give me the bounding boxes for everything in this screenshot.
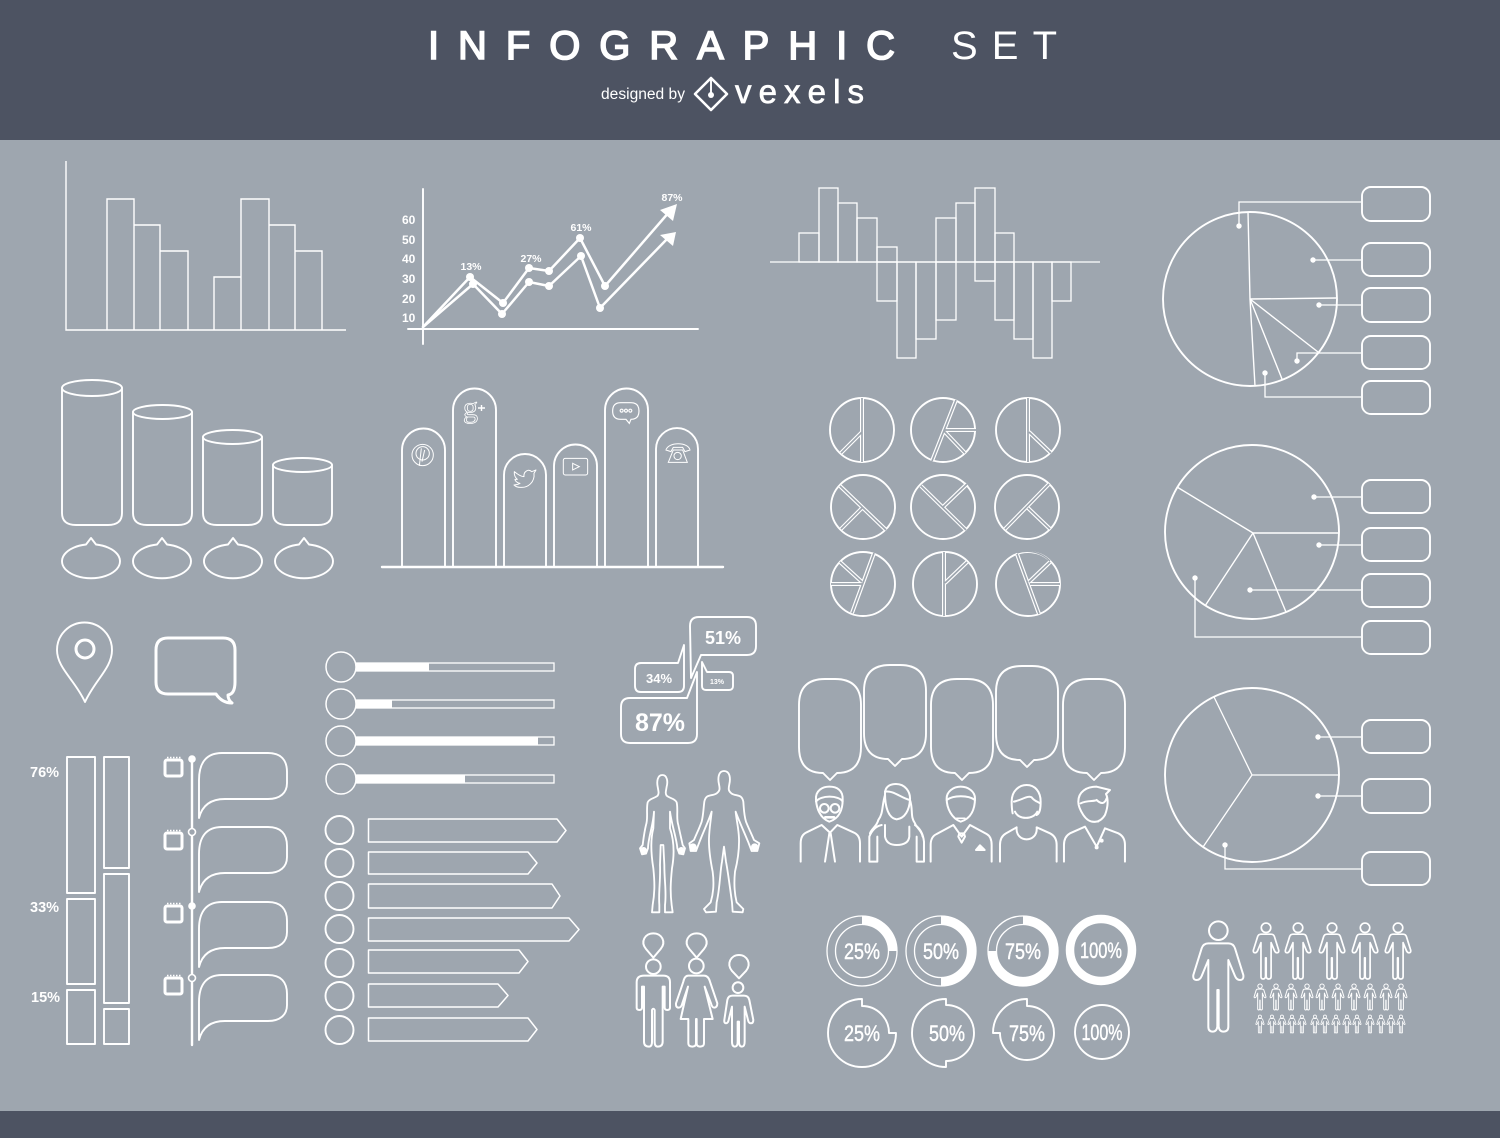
callout boxes [1362, 187, 1430, 414]
large person [1193, 921, 1243, 1032]
y axis labels: 60 [402, 213, 416, 227]
notched circle 25% [828, 999, 896, 1067]
small pie row 1 [830, 398, 1060, 462]
y axis labels: 20 [402, 292, 416, 306]
arrow bars with circles [326, 816, 579, 1044]
timeline with calendars and speech tabs [165, 753, 287, 1045]
callout leaders [1225, 737, 1361, 869]
chart axes [408, 189, 698, 344]
y axis labels: 40 [402, 252, 416, 266]
tall speech bubbles [799, 665, 1125, 780]
cylinder chart [62, 380, 333, 578]
ring 50% [906, 916, 976, 986]
timeline axis and markers [188, 755, 196, 1045]
notched circle 100%: 100% [1082, 1020, 1122, 1045]
trend lines [423, 204, 677, 327]
pie chart 1 with five callouts [1163, 187, 1430, 414]
callout boxes [1362, 480, 1430, 654]
footer band [0, 1111, 1500, 1138]
callout boxes [1362, 720, 1430, 885]
avatar: man with quiff [1064, 787, 1125, 862]
stacked columns [67, 757, 129, 1044]
icon: twitter [514, 470, 536, 487]
percent labels: 61% [570, 222, 592, 234]
ring 25% [827, 916, 897, 986]
percent labels: 76% [30, 765, 59, 781]
line chart: two rising trends [402, 189, 698, 344]
ring 100% [1070, 919, 1132, 981]
header band [0, 0, 1500, 140]
bubble 51%: 51% [705, 628, 741, 648]
ring 25%: 25% [844, 939, 880, 964]
progress bars with circles [326, 652, 554, 794]
bubble 87%: 87% [635, 709, 685, 737]
credit: designed by vexels: designed by [601, 86, 685, 103]
small pie row 2 [831, 475, 1059, 539]
percent labels [460, 192, 683, 273]
calendar icons [165, 758, 182, 994]
icon: map pin [57, 622, 112, 702]
y axis labels: 50 [402, 233, 416, 247]
avatar: woman with long hair [869, 784, 924, 862]
y axis labels: 10 [402, 311, 416, 325]
percent labels: 33% [30, 900, 59, 916]
cylinders [62, 380, 332, 525]
notched progress circles [828, 999, 1129, 1067]
notched circle 100% [1075, 1005, 1129, 1059]
icon: pinterest [412, 444, 433, 466]
icon: video play [563, 458, 588, 475]
percentage speech bubbles [621, 617, 756, 743]
notched circle 25%: 25% [844, 1021, 880, 1046]
male body outline [689, 771, 759, 912]
progress row 2 [326, 689, 554, 719]
woman figure [676, 933, 717, 1047]
icon: google plus: g [463, 391, 478, 424]
small people row [1254, 984, 1407, 1010]
bubble 34%: 34% [646, 671, 672, 686]
circles [326, 816, 354, 1044]
arrow bars [368, 819, 579, 1041]
notched circle 50%: 50% [929, 1021, 965, 1046]
hands [640, 843, 758, 854]
family pictograms with thought bubbles [637, 933, 753, 1047]
y axis labels [402, 213, 416, 325]
pie chart 2 with four callouts [1165, 445, 1430, 654]
icon: telephone [666, 444, 690, 462]
percent labels: 15% [31, 990, 60, 1006]
credit: designed by vexels [601, 73, 864, 110]
notched circle 75% [993, 999, 1054, 1060]
notched circle 75%: 75% [1009, 1021, 1045, 1046]
stacked bars with percentages [30, 757, 129, 1044]
progress row 3 [326, 726, 554, 756]
credit: designed by vexels: vexels [735, 73, 864, 110]
ring 75% [988, 916, 1058, 986]
small pie row 3 [831, 551, 1060, 616]
rounded column chart with social icons [382, 388, 723, 567]
bar chart: grouped columns [66, 161, 346, 330]
ring 50%: 50% [923, 939, 959, 964]
ring 75%: 75% [1005, 939, 1041, 964]
anatomy figures [640, 771, 759, 912]
percent labels: 27% [520, 253, 542, 265]
female body outline [640, 775, 685, 912]
avatars row [801, 784, 1125, 862]
icon: chat bubble [613, 403, 639, 423]
percent labels: 13% [460, 261, 482, 273]
man figure [637, 933, 670, 1047]
people pictogram scale [1193, 921, 1411, 1033]
avatar: man with glasses [801, 787, 860, 862]
medium people row [1253, 923, 1411, 979]
icon: google plus [463, 391, 485, 424]
y axis labels: 30 [402, 272, 416, 286]
avatar: woman with bob [1000, 785, 1057, 862]
pie circle and slices [1163, 212, 1337, 386]
donut progress rings [827, 916, 1132, 986]
icon: speech bubble [156, 638, 235, 703]
ellipse labels [62, 538, 333, 578]
small pie chart grid [830, 398, 1060, 616]
progress row 4 [326, 764, 554, 794]
speech tabs [199, 753, 287, 1040]
ring 100%: 100% [1080, 938, 1122, 963]
notched circle 50% [912, 999, 974, 1067]
avatar: man in suit [931, 787, 992, 862]
pie chart 3 with three callouts [1165, 688, 1430, 885]
percent labels [30, 765, 60, 1006]
bubble 13%: 13% [710, 679, 725, 686]
title: INFOGRAPHIC [428, 24, 895, 68]
tiny people row [1256, 1015, 1405, 1033]
columns and baseline [382, 388, 723, 567]
diverging bar chart [770, 188, 1100, 358]
title: SET [951, 24, 1057, 68]
child figure [724, 955, 753, 1047]
callout leaders [1195, 497, 1361, 637]
callout leaders [1239, 202, 1361, 397]
percent labels: 87% [661, 192, 683, 204]
progress row 1 [326, 652, 554, 682]
